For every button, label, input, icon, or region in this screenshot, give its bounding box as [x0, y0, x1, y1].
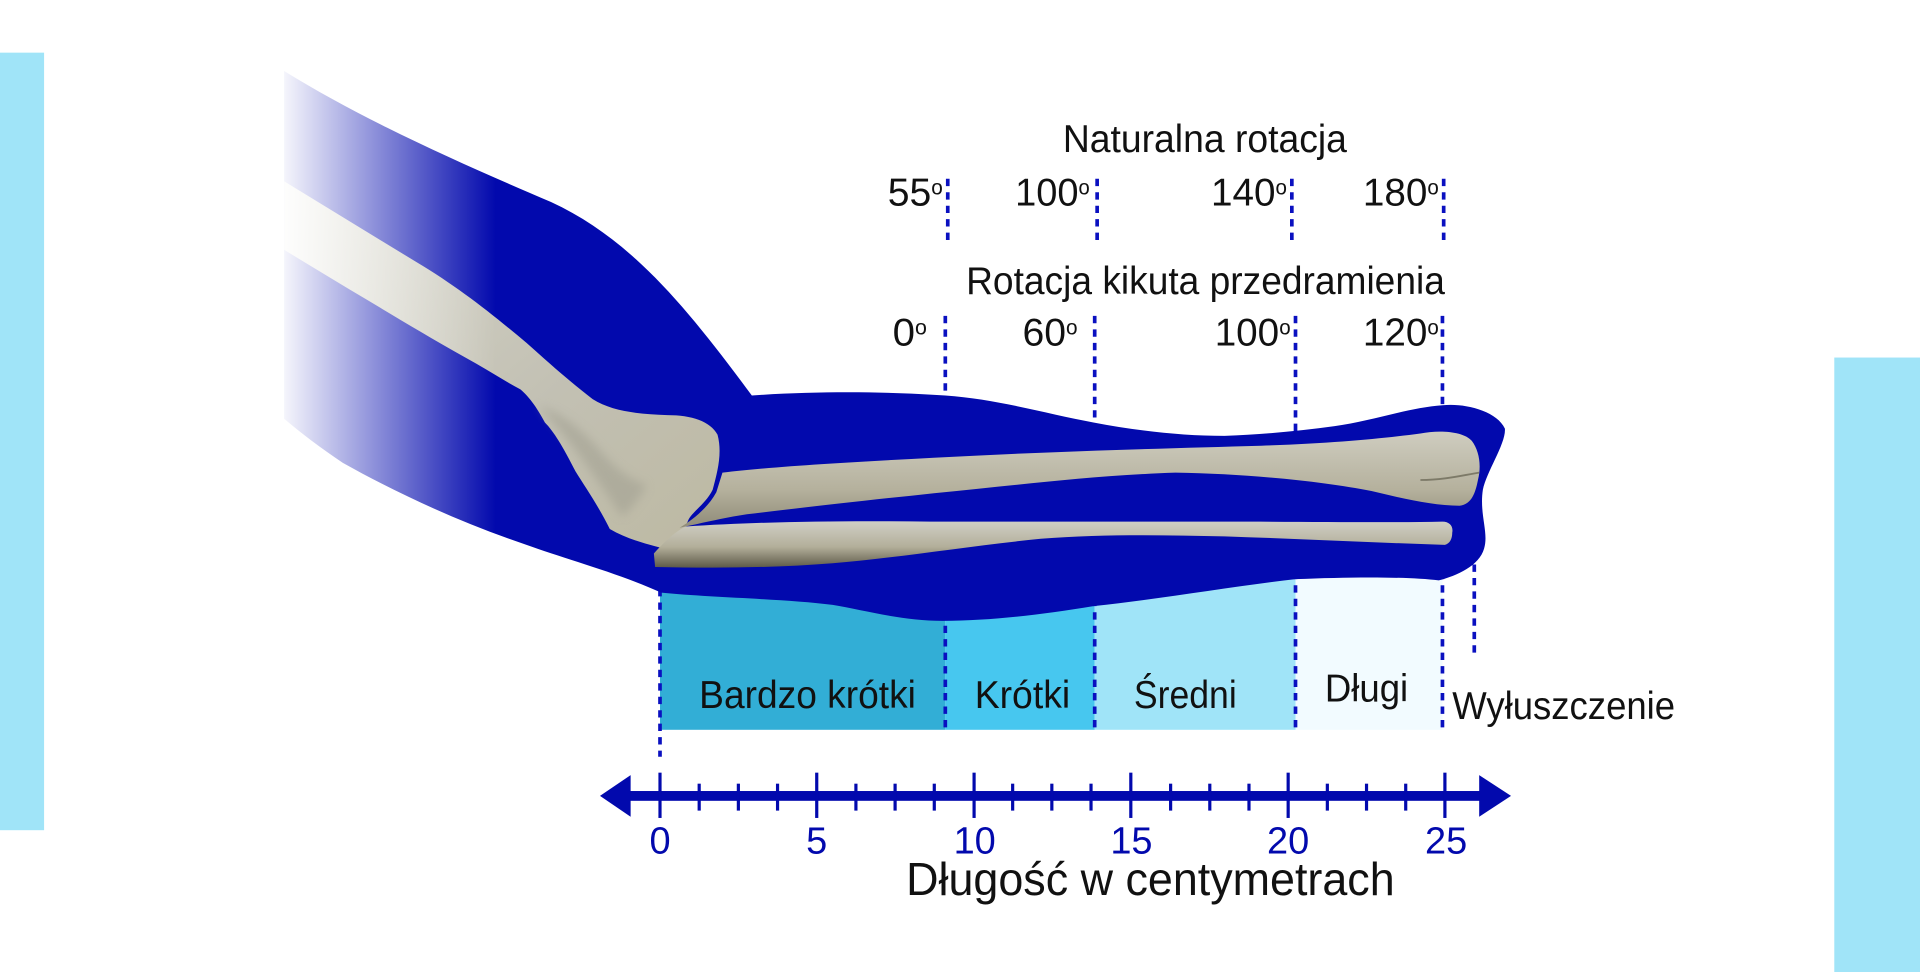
- left side bar: [0, 53, 44, 830]
- bone: humerus shadow: [539, 407, 647, 517]
- bone: ulna: [654, 521, 1452, 568]
- ruler numbers: 0: [649, 820, 671, 862]
- zone: very short: [660, 576, 945, 730]
- natural rotation values: o: [1079, 177, 1090, 200]
- natural rotation values: 180: [1363, 172, 1428, 215]
- stump rotation values: [893, 311, 1439, 354]
- natural rotation values: [888, 172, 1439, 215]
- arm silhouette: [284, 71, 1505, 621]
- label: disarticulation: Wyłuszczenie: [1452, 685, 1675, 728]
- stump rotation values: 120: [1363, 311, 1428, 354]
- right side bar: [1834, 358, 1920, 972]
- stump rotation values: o: [915, 316, 927, 339]
- natural rotation values: 140: [1211, 172, 1276, 215]
- stump rotation values: 60: [1022, 311, 1066, 354]
- panel: length zones: [660, 576, 1442, 730]
- bone: humerus: [284, 181, 720, 551]
- ruler ticks: [660, 773, 1445, 818]
- natural rotation values: o: [1427, 177, 1439, 200]
- stump rotation values: o: [1279, 316, 1291, 339]
- zone: short: [945, 576, 1095, 730]
- zone labels: Długi: [1325, 668, 1408, 711]
- natural rotation values: 100: [1015, 172, 1080, 215]
- dashed guides: natural rotation: [948, 179, 1444, 246]
- dashed guides: stump rotation and zones: [660, 316, 1474, 757]
- natural rotation values: 55: [888, 172, 931, 215]
- bone: radius: [680, 432, 1480, 528]
- zone labels: Średni: [1134, 672, 1237, 717]
- arrow: left: [600, 775, 631, 817]
- ruler numbers: 20: [1267, 820, 1309, 862]
- fade over upper arm: [276, 61, 496, 563]
- stump rotation values: o: [1427, 316, 1439, 339]
- ruler axis: [600, 773, 1511, 862]
- natural rotation values: o: [931, 177, 943, 200]
- ruler numbers: 15: [1110, 820, 1153, 862]
- stump rotation values: 0: [893, 311, 914, 354]
- zone labels: Bardzo krótki: [699, 674, 916, 717]
- ruler numbers: 10: [954, 820, 996, 862]
- heading: natural rotation: Naturalna rotacja: [1063, 118, 1347, 161]
- zone: long: [1296, 576, 1442, 730]
- arrow: right: [1479, 775, 1511, 817]
- zone labels: [699, 668, 1408, 717]
- zone: medium: [1095, 576, 1296, 730]
- zone labels: Krótki: [975, 674, 1070, 717]
- natural rotation values: o: [1276, 177, 1287, 200]
- heading: stump rotation: Rotacja kikuta przedramienia: [966, 260, 1445, 303]
- ruler numbers: [649, 820, 1467, 862]
- stump rotation values: o: [1066, 316, 1078, 339]
- ruler numbers: 5: [806, 820, 827, 862]
- axis title: Długość w centymetrach: [906, 853, 1395, 905]
- stump rotation values: 100: [1215, 311, 1280, 354]
- bone: radius head groove: [1420, 473, 1479, 480]
- ruler numbers: 25: [1425, 820, 1467, 862]
